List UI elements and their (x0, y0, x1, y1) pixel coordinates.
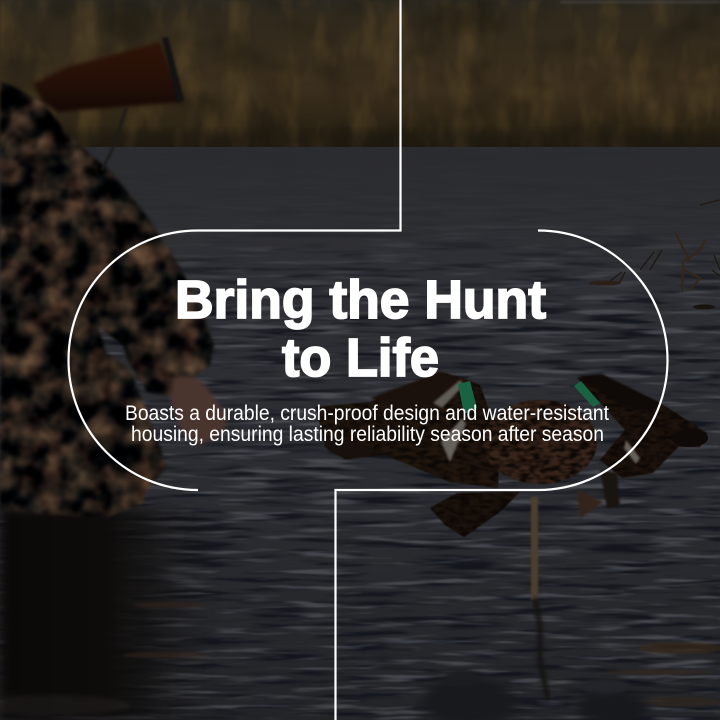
gun stock (33, 42, 183, 112)
hunter in camouflage (0, 37, 228, 517)
background photo: reed bank (0, 0, 720, 150)
title: to Life (282, 328, 439, 388)
right outline: right capsule arc and vertical line (336, 230, 668, 720)
decoy foot and leg (600, 470, 620, 508)
decoy left wing white and green patches (433, 380, 464, 408)
description text: Boasts a durable, crush-proof design and water-resistant (125, 402, 609, 425)
background photo: water (0, 147, 720, 720)
sling (102, 108, 126, 170)
decoy right wing (577, 375, 707, 478)
decoy lower tail (430, 492, 520, 537)
hunter hand (170, 376, 228, 445)
water shadow reflection under hunter (0, 508, 215, 720)
decoy left wing (316, 372, 500, 488)
marsh grass tufts (589, 200, 720, 310)
description text (125, 402, 609, 446)
blurred foreground decoys (424, 670, 648, 720)
left outline: vertical line and left capsule arc (68, 0, 400, 490)
hunter body (0, 80, 214, 517)
duck decoy (316, 372, 708, 700)
title: Bring the Hunt (175, 270, 546, 330)
decoy reflection (535, 598, 548, 700)
decoy stake (531, 497, 538, 600)
description text: housing, ensuring lasting reliability season after season (131, 423, 604, 446)
title (175, 270, 546, 388)
decoy body (483, 400, 597, 484)
